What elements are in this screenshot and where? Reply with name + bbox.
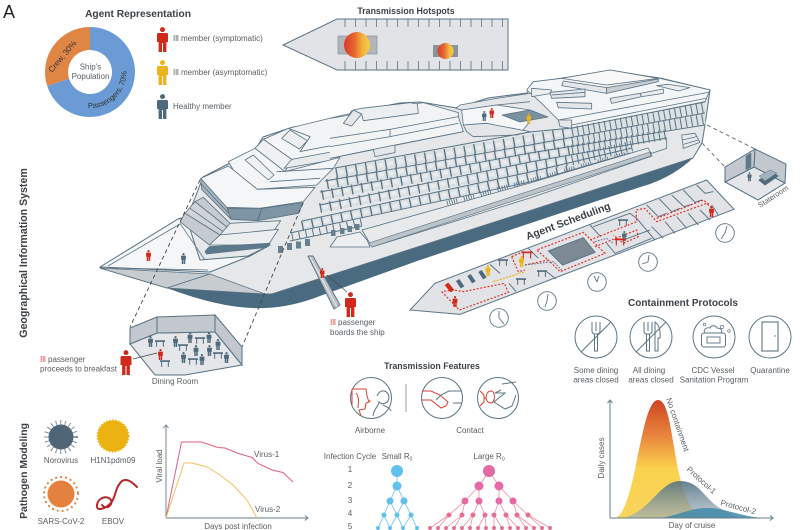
area chart: daily cases: Protocol-1	[685, 465, 718, 496]
hull waterline band	[167, 158, 693, 308]
panel: infection cycle trees	[324, 452, 552, 530]
lying agents	[445, 283, 454, 292]
panel: pathogen modeling	[19, 420, 308, 530]
icon: all dining areas closed: All dining	[633, 366, 665, 375]
tree: large R0	[428, 452, 552, 530]
donut chart: ship population	[45, 27, 135, 117]
legend: ill asymptomatic: Ill member (asymptomatic)	[173, 68, 268, 77]
legend: ill symptomatic	[157, 27, 263, 52]
heading: pathogen modeling: Pathogen Modeling	[19, 423, 30, 519]
panel: transmission hotspots	[283, 6, 508, 70]
midship upper decks	[330, 93, 530, 158]
tree: large R0: Large R	[473, 452, 502, 461]
callout: ill passenger proceeds to breakfast	[40, 350, 157, 375]
icon: some dining areas closed: Some dining	[574, 366, 618, 375]
bow deck	[100, 217, 270, 272]
scheduling deck plan	[410, 180, 734, 314]
small windows row	[292, 222, 362, 237]
legend: healthy: Healthy member	[173, 102, 232, 111]
dining room label: Dining Room	[152, 377, 198, 386]
row backgrounds	[302, 108, 705, 226]
area chart: daily cases	[597, 397, 773, 530]
heading: geographical information system: Geographical Information System	[18, 168, 30, 338]
icon: CDC sanitation	[680, 316, 749, 384]
panel: stateroom	[725, 149, 790, 210]
infection cycle labels: 1	[348, 465, 353, 474]
icon: some dining areas closed	[573, 316, 619, 384]
stateroom label: Stateroom	[756, 183, 790, 210]
virus: H1N1pdm09: H1N1pdm09	[91, 456, 136, 465]
icon: all dining areas closed	[628, 316, 674, 384]
dashed callout lines	[130, 125, 755, 347]
panel: transmission features	[350, 361, 518, 435]
heading: transmission hotspots: Transmission Hotspots	[357, 6, 455, 16]
room walls and floor	[130, 315, 242, 375]
panel: agent representation	[45, 9, 268, 119]
panel label A: A	[3, 2, 15, 22]
virus: EBOV: EBOV	[102, 517, 125, 526]
row lines	[290, 102, 705, 241]
icon: quarantine door	[749, 316, 791, 375]
icon: hand touching surface	[478, 378, 518, 418]
infection cycle labels: 4	[348, 509, 353, 518]
donut chart: ship population: Passengers, 70%	[88, 71, 126, 108]
stern upper decks	[527, 70, 710, 153]
forward balconies	[302, 132, 572, 226]
infection cycle labels: 2	[348, 481, 353, 490]
tree: large R0: 0	[502, 456, 505, 462]
lifeboats	[278, 224, 360, 253]
promenade strip	[362, 148, 652, 247]
area chart: daily cases: Protocol-2	[719, 498, 758, 517]
forward stepped superstructure	[180, 110, 370, 260]
guest	[748, 172, 752, 181]
curve: protocol 2	[660, 508, 762, 518]
infection cycle labels	[324, 452, 377, 530]
stateroom box	[725, 149, 786, 200]
virus: SARS-CoV-2	[38, 477, 85, 526]
red diner	[158, 349, 163, 360]
tree: small R0: Small R	[382, 452, 410, 461]
promenade recess	[330, 232, 370, 247]
legend: ill asymptomatic	[157, 60, 268, 85]
line chart: viral load: Virus-1	[254, 450, 280, 459]
divider	[405, 384, 407, 412]
panel: dining room	[130, 315, 242, 386]
bow facets	[100, 268, 265, 294]
virus: EBOV	[97, 480, 137, 526]
scheduling agents	[453, 206, 714, 307]
icon: handshake	[422, 378, 462, 418]
callout: ill passenger proceeds to breakfast: proceeds to breakfast	[40, 364, 118, 374]
panel: containment protocols	[573, 298, 791, 530]
contact label: Contact	[456, 426, 485, 435]
curve: no containment	[615, 400, 710, 518]
pool	[502, 110, 548, 122]
schedule clocks	[490, 224, 734, 327]
virus: norovirus: Norovirus	[44, 456, 78, 465]
line chart: viral load: Virus-2	[255, 505, 281, 514]
heading: containment protocols: Containment Protocols	[628, 298, 738, 309]
virus: H1N1pdm09	[91, 420, 136, 465]
icon: CDC sanitation: CDC Vessel	[691, 366, 735, 375]
area chart: daily cases: No containment	[664, 397, 691, 453]
gangway	[308, 256, 340, 309]
line chart: viral load: Viral load	[155, 449, 164, 483]
red agent on bow	[146, 250, 151, 261]
icon: airborne: Airborne	[355, 426, 386, 435]
donut chart: ship population: Population	[72, 72, 109, 81]
heading: agent representation: Agent Representation	[85, 9, 191, 20]
callout: ill passenger boards the ship: Ill passenger	[330, 318, 376, 327]
icon: all dining areas closed: areas closed	[628, 376, 674, 384]
virus: norovirus	[44, 422, 78, 465]
pool deck agents	[482, 108, 531, 124]
callout: ill passenger proceeds to breakfast: Ill passenger	[40, 355, 86, 364]
legend: healthy	[157, 94, 232, 119]
tree: small R0	[376, 452, 419, 530]
icon: some dining areas closed: areas closed	[573, 376, 619, 384]
healthy agent on bow	[181, 253, 186, 264]
deck plan with hotspots	[283, 19, 508, 70]
callout: ill passenger boards the ship: boards the ship	[330, 328, 385, 337]
panel: agent scheduling	[410, 180, 734, 327]
infection cycle labels: Infection Cycle	[324, 452, 377, 461]
virus: SARS-CoV-2: SARS-CoV-2	[38, 517, 85, 526]
icon: CDC sanitation: Sanitation Program	[680, 376, 749, 384]
area chart: daily cases: Day of cruise	[669, 521, 716, 530]
tree: small R0: 0	[410, 456, 413, 462]
donut chart: ship population: Crew, 30%	[47, 39, 78, 74]
icon: quarantine door: Quarantine	[750, 366, 790, 375]
heading: transmission features: Transmission Features	[384, 361, 480, 371]
hull and superstructure body	[100, 71, 710, 294]
legend: ill symptomatic: Ill member (symptomatic)	[173, 34, 263, 43]
donut chart: ship population: Ship's	[80, 62, 101, 72]
illustration: cruise ship	[100, 70, 710, 309]
callout: ill passenger boards the ship	[320, 268, 385, 337]
balcony rows	[290, 102, 705, 241]
line chart: viral load	[155, 425, 308, 530]
diners and tables	[148, 332, 229, 367]
axes	[608, 400, 773, 520]
aft balconies	[572, 108, 705, 160]
heading: agent scheduling: Agent Scheduling	[524, 200, 612, 243]
curve: protocol 1	[623, 481, 742, 518]
infection cycle labels: 3	[348, 496, 353, 505]
area chart: daily cases: Daily cases	[597, 438, 606, 478]
icon: airborne	[350, 378, 392, 435]
